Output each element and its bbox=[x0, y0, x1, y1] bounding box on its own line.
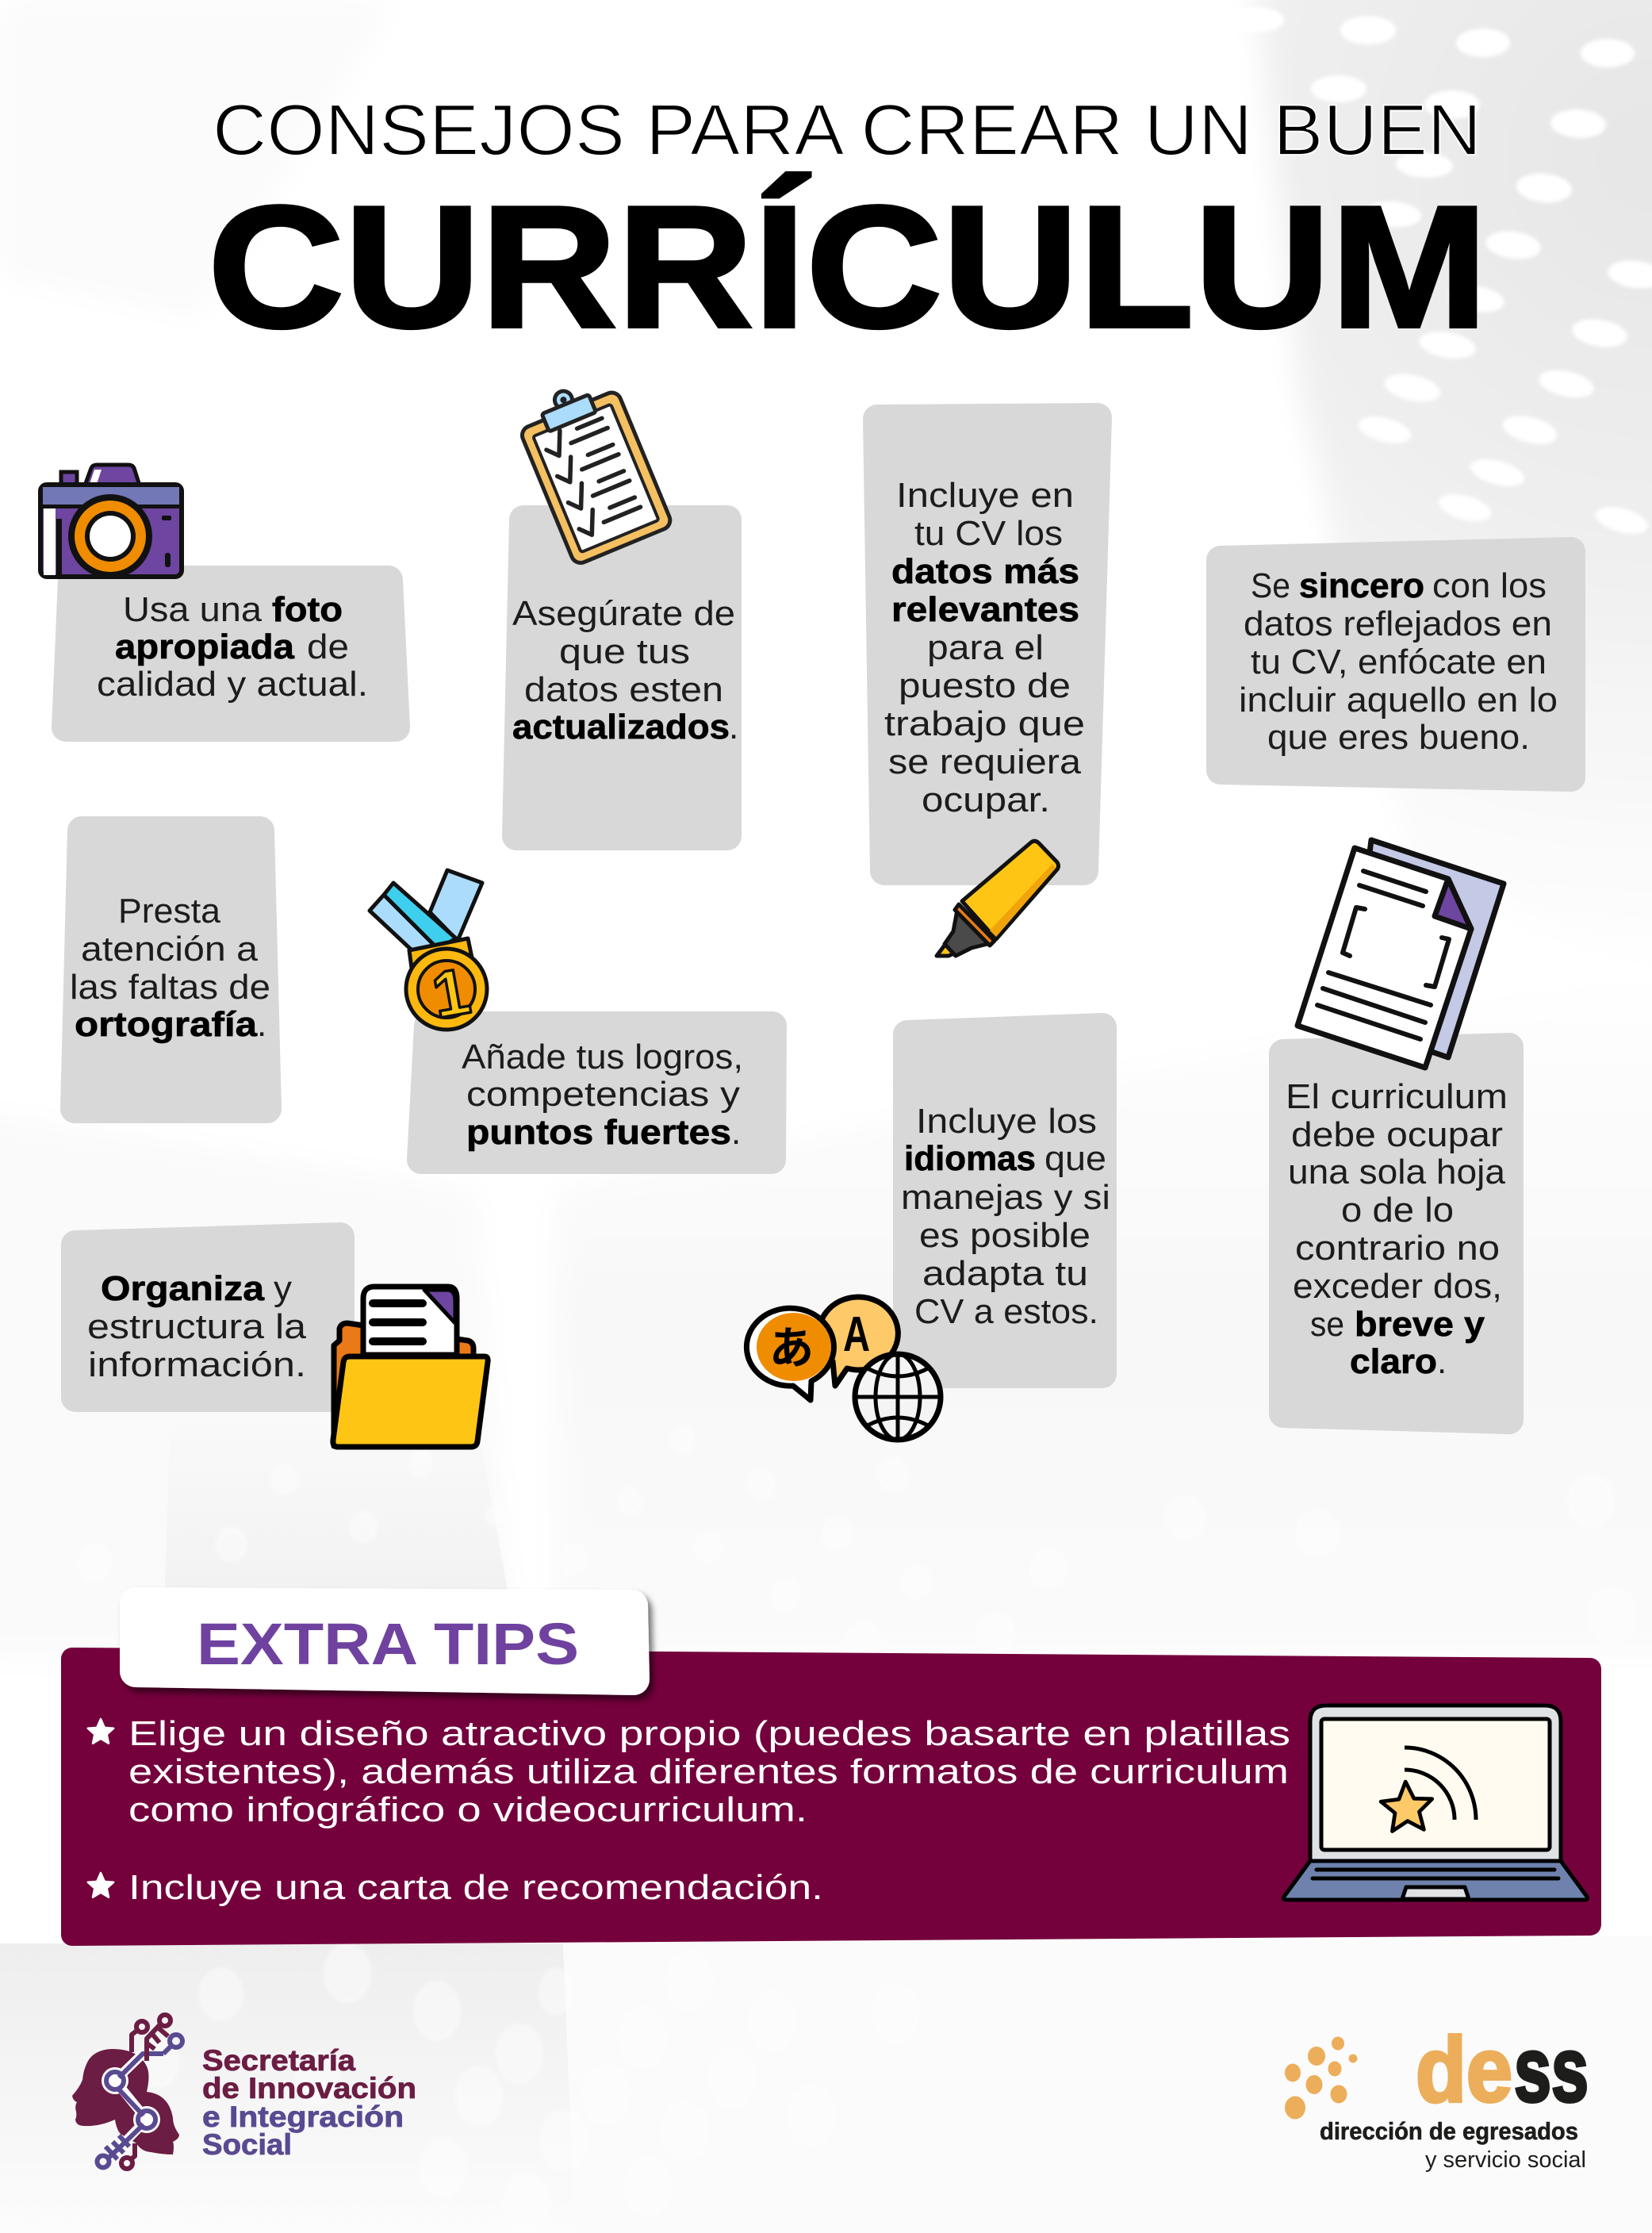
text: curriculum: contrario no bbox=[1295, 1229, 1500, 1268]
icon: camera bbox=[40, 465, 182, 578]
banner bbox=[72, 1659, 1590, 1935]
panel: sincero bbox=[1221, 551, 1571, 777]
text: foto: apropiada bbox=[115, 627, 295, 666]
text: sincero: Se bbox=[1251, 566, 1290, 605]
text: organiza: información. bbox=[88, 1345, 306, 1384]
text: idiomas: CV a estos. bbox=[914, 1292, 1098, 1331]
tab: extra tips bbox=[136, 1603, 634, 1679]
text: organiza: Organiza bbox=[101, 1269, 265, 1308]
text: curriculum bbox=[1286, 1077, 1508, 1381]
card bbox=[516, 520, 727, 836]
text: idiomas: que bbox=[1044, 1139, 1106, 1178]
text: datos relevantes bbox=[884, 476, 1085, 819]
text: actualizados: datos esten bbox=[524, 670, 723, 709]
text: idiomas: idiomas bbox=[904, 1139, 1036, 1178]
text: ortografía: las faltas de bbox=[70, 968, 270, 1007]
icon: languages bbox=[746, 1297, 941, 1440]
star bullet 1 bbox=[88, 1719, 113, 1744]
text: foto: Usa una bbox=[123, 590, 263, 629]
text: curriculum: se bbox=[1310, 1305, 1344, 1344]
card bbox=[75, 831, 267, 1109]
text: foto: foto bbox=[272, 590, 343, 629]
text: ortografía bbox=[70, 892, 270, 1044]
panel: foto bbox=[66, 580, 396, 727]
panel: extra tips bbox=[72, 1603, 1590, 1935]
icon: clipboard bbox=[512, 371, 673, 566]
panel: idiomas bbox=[901, 1027, 1110, 1374]
panel: logros bbox=[421, 1026, 772, 1160]
tip 1: como infográfico o videocurriculum. bbox=[128, 1790, 807, 1829]
text: datos relevantes: tu CV los bbox=[914, 514, 1063, 553]
text: actualizados: actualizados bbox=[512, 708, 730, 746]
text: actualizados bbox=[512, 594, 738, 746]
panel: curriculum bbox=[1283, 1047, 1509, 1420]
text: curriculum: breve y bbox=[1355, 1305, 1485, 1344]
text: foto: calidad y actual. bbox=[97, 665, 368, 704]
text: datos relevantes: ocupar. bbox=[922, 781, 1050, 819]
tip 1: Elige un diseño atractivo propio (puedes basarte en platillas bbox=[128, 1714, 1290, 1753]
text: logros: puntos fuertes bbox=[466, 1113, 731, 1152]
logo: Secretaría de Innovación e Integración Social bbox=[72, 2015, 416, 2169]
text: ortografía: Presta bbox=[118, 892, 221, 930]
icon: document bbox=[1297, 840, 1504, 1068]
text: sincero: con los bbox=[1432, 566, 1547, 605]
text: ortografía: atención a bbox=[81, 930, 259, 969]
text: sincero: sincero bbox=[1299, 566, 1424, 605]
text: curriculum: una sola hoja bbox=[1288, 1153, 1506, 1191]
logo text: de Innovación bbox=[202, 2072, 416, 2104]
dess wordmark: de bbox=[1416, 2018, 1512, 2121]
icon: medal: 1 bbox=[427, 955, 475, 1032]
logo: dess bbox=[1285, 2018, 1589, 2173]
card bbox=[75, 1237, 340, 1398]
dess wordmark bbox=[1416, 2018, 1589, 2121]
logo text: e Integración bbox=[202, 2101, 404, 2133]
card bbox=[421, 1026, 772, 1160]
text: sincero: incluir aquello en lo bbox=[1239, 681, 1558, 719]
text: datos relevantes: se requiera bbox=[888, 742, 1082, 781]
text: datos relevantes: relevantes bbox=[891, 590, 1079, 629]
text: sincero: tu CV, enfócate en bbox=[1251, 643, 1547, 681]
tip 1: existentes), además utiliza diferentes formatos de curriculum bbox=[128, 1752, 1289, 1791]
text: logros bbox=[462, 1038, 743, 1152]
text: datos relevantes: trabajo que bbox=[884, 704, 1085, 743]
panel: organiza bbox=[75, 1237, 340, 1398]
card bbox=[877, 417, 1098, 871]
icon: languages: あ bbox=[769, 1323, 814, 1373]
text: sincero: que eres bueno. bbox=[1267, 718, 1530, 757]
card bbox=[1283, 1047, 1509, 1420]
text: curriculum: claro bbox=[1350, 1342, 1437, 1381]
text: idiomas: manejas y si bbox=[901, 1178, 1110, 1217]
logo text: Social bbox=[202, 2128, 292, 2161]
text: actualizados: Asegúrate de bbox=[512, 594, 735, 633]
text: idiomas: Incluye los bbox=[916, 1102, 1097, 1141]
text: ortografía: ortografía bbox=[75, 1005, 258, 1044]
text: idiomas bbox=[901, 1102, 1110, 1331]
dess caption: y servicio social bbox=[1425, 2147, 1586, 2173]
dots bbox=[1285, 2037, 1358, 2120]
icon: highlighter bbox=[937, 841, 1058, 956]
dess caption: dirección de egresados bbox=[1320, 2117, 1578, 2145]
logo text: Secretaría bbox=[202, 2044, 355, 2077]
icon: laptop bbox=[1283, 1705, 1588, 1900]
card bbox=[1221, 551, 1571, 777]
text: actualizados: . bbox=[729, 708, 738, 746]
text: logros: competencias y bbox=[466, 1075, 740, 1114]
text: organiza: estructura la bbox=[87, 1307, 307, 1346]
dess caption bbox=[1320, 2117, 1586, 2173]
text: datos relevantes: puesto de bbox=[899, 666, 1071, 705]
text: organiza bbox=[87, 1269, 307, 1384]
dess wordmark: ss bbox=[1514, 2018, 1589, 2121]
title bbox=[208, 90, 1488, 364]
panel: ortografía bbox=[70, 831, 270, 1109]
text: datos relevantes: Incluye en bbox=[896, 476, 1074, 515]
panel: actualizados bbox=[512, 520, 738, 836]
text: curriculum: debe ocupar bbox=[1291, 1115, 1503, 1154]
text: curriculum: o de lo bbox=[1341, 1191, 1454, 1230]
text: foto bbox=[97, 590, 368, 704]
text: actualizados: que tus bbox=[559, 632, 690, 671]
text: sincero bbox=[1239, 566, 1558, 757]
title line 1: CONSEJOS PARA CREAR UN BUEN bbox=[213, 90, 1481, 171]
text: datos relevantes: para el bbox=[927, 628, 1044, 667]
icon: medal bbox=[370, 870, 487, 1032]
panel: datos relevantes bbox=[877, 417, 1098, 871]
logo text bbox=[202, 2044, 416, 2161]
tip 2: Incluye una carta de recomendación. bbox=[128, 1868, 823, 1907]
text: organiza: y bbox=[274, 1269, 292, 1308]
text: curriculum: El curriculum bbox=[1286, 1077, 1508, 1116]
text: idiomas: es posible bbox=[919, 1216, 1090, 1255]
icon: languages: A bbox=[843, 1307, 870, 1362]
text: datos relevantes: datos más bbox=[891, 552, 1079, 591]
logo mark: heads and circuit bbox=[72, 2015, 182, 2169]
text: curriculum: exceder dos, bbox=[1293, 1267, 1502, 1306]
text: ortografía: . bbox=[257, 1005, 266, 1044]
text: foto: de bbox=[307, 627, 349, 666]
tip 1 bbox=[128, 1714, 1290, 1829]
text: sincero: datos reflejados en bbox=[1244, 604, 1552, 643]
text: logros: . bbox=[731, 1113, 741, 1152]
icon: folder bbox=[333, 1287, 488, 1447]
card bbox=[907, 1027, 1102, 1374]
text: idiomas: adapta tu bbox=[922, 1254, 1088, 1293]
card bbox=[66, 580, 396, 727]
title line 2: CURRÍCULUM bbox=[208, 171, 1488, 364]
text: logros: Añade tus logros, bbox=[462, 1038, 743, 1076]
star bullet 2 bbox=[88, 1873, 113, 1897]
text: curriculum: . bbox=[1437, 1342, 1447, 1381]
tab: extra tips: EXTRA TIPS bbox=[197, 1611, 579, 1677]
